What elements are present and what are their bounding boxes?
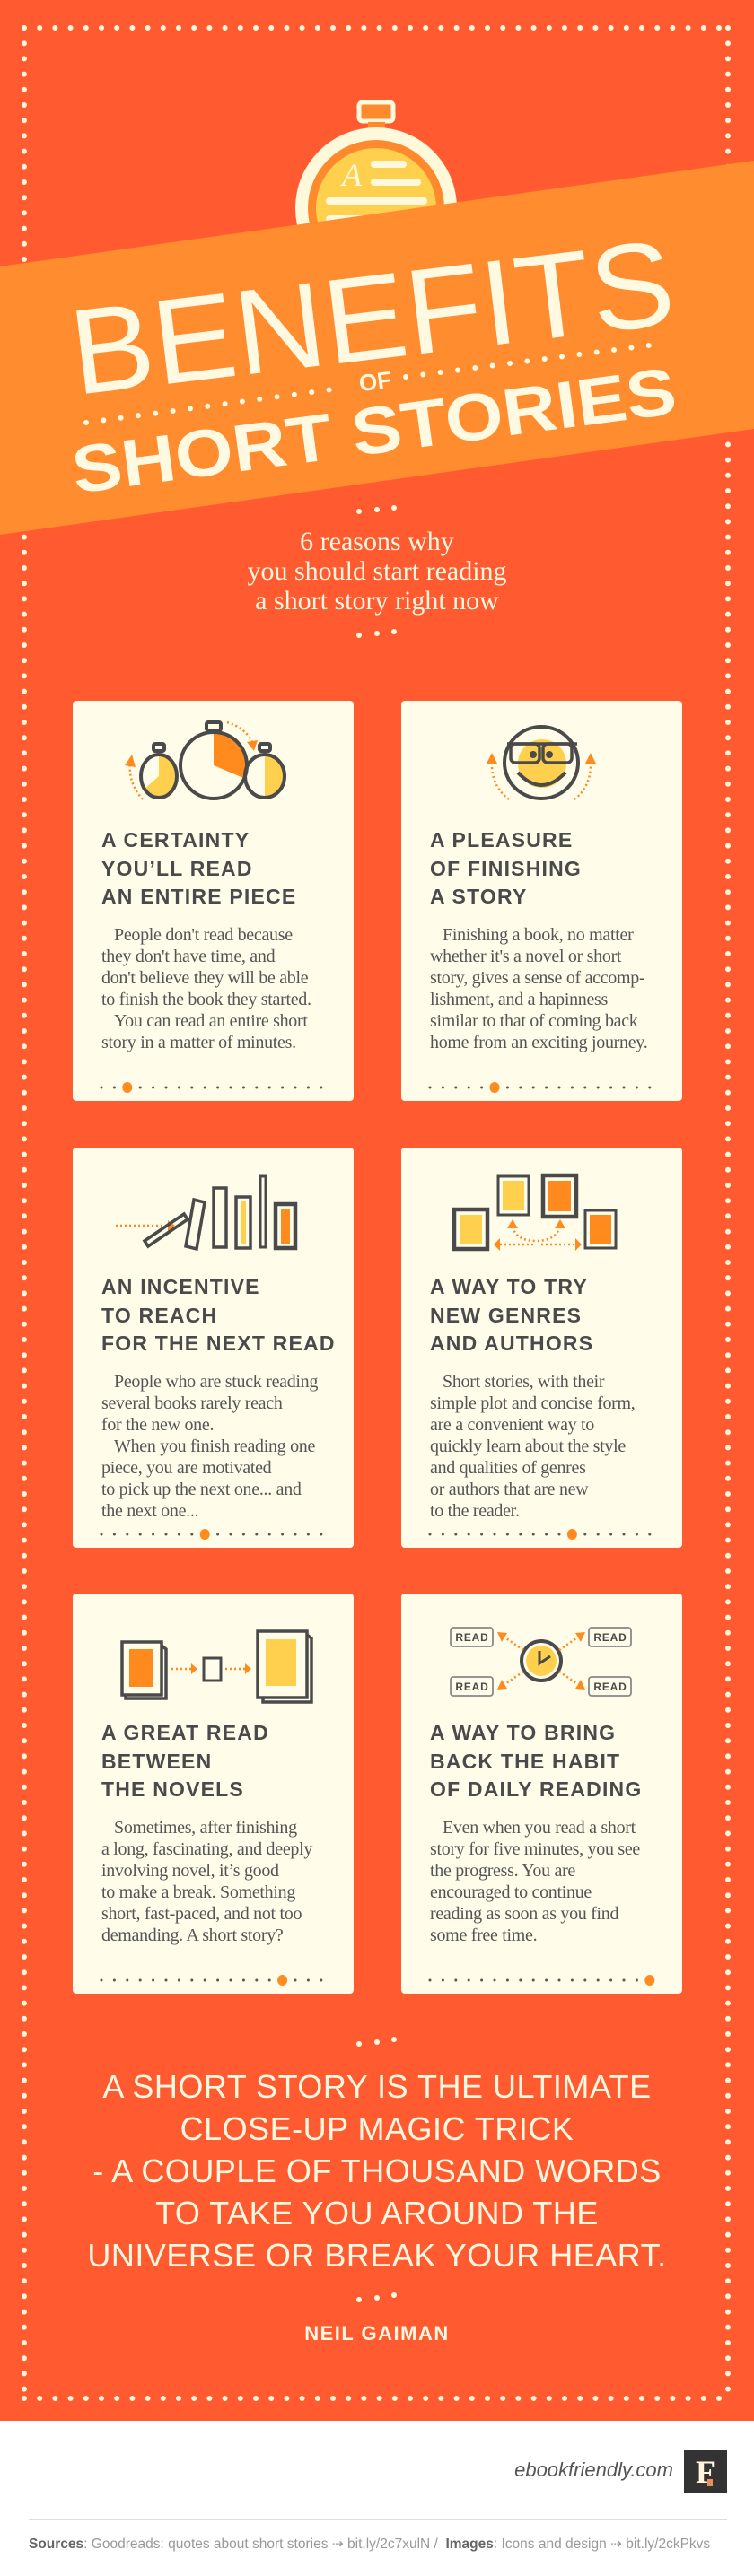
card 4: new genres xyxy=(401,1148,682,1548)
heading: BETWEEN xyxy=(101,1750,212,1773)
card 1: certainty xyxy=(73,701,354,1101)
icon: clock with READ labels: READ xyxy=(593,1681,627,1693)
body text: the next one... xyxy=(101,1501,198,1521)
body text xyxy=(101,925,311,1052)
body text: simple plot and concise form, xyxy=(430,1393,635,1413)
progress dots xyxy=(101,1082,323,1093)
icon: falling books xyxy=(116,1175,298,1251)
icon: smiling face with glasses xyxy=(487,725,596,800)
heading xyxy=(101,828,296,908)
subtitle dots xyxy=(356,505,397,2302)
sources: Sources: Goodreads: quotes about short stories ⇢ bit.ly/2c7xulN / Images: Icons and design ⇢ bit.ly/2ckPkvs xyxy=(29,2537,710,2552)
icon: stopwatch with text: A xyxy=(340,157,363,193)
logo xyxy=(684,2450,727,2493)
heading: OF FINISHING xyxy=(430,856,582,879)
body text: similar to that of coming back xyxy=(430,1011,637,1031)
quote: TO TAKE YOU AROUND THE xyxy=(155,2195,599,2231)
heading: A WAY TO TRY xyxy=(430,1275,588,1298)
progress dots xyxy=(101,1975,323,1986)
body text xyxy=(430,925,647,1052)
quote: - A COUPLE OF THOUSAND WORDS xyxy=(92,2152,662,2189)
body text: reading as soon as you find xyxy=(430,1904,618,1924)
heading: NEW GENRES xyxy=(430,1303,582,1326)
subtitle: 6 reasons why xyxy=(300,527,454,556)
heading: OF DAILY READING xyxy=(430,1777,642,1801)
heading xyxy=(430,828,582,908)
quote author: NEIL GAIMAN xyxy=(304,2322,450,2345)
body text: Short stories, with their xyxy=(443,1372,604,1392)
body text: whether it's a novel or short xyxy=(430,947,621,966)
title: OF with dotted lines: OF xyxy=(357,366,393,397)
body text: and qualities of genres xyxy=(430,1458,586,1478)
body text: encouraged to continue xyxy=(430,1882,592,1902)
quote: CLOSE-UP MAGIC TRICK xyxy=(180,2110,574,2147)
body text: Even when you read a short xyxy=(443,1818,636,1838)
body text: short, fast-paced, and not too xyxy=(101,1904,302,1924)
title: SHORT STORIES: SHORT STORIES xyxy=(67,354,680,508)
title: OF with dotted lines xyxy=(86,344,662,423)
footer brand xyxy=(514,2450,727,2493)
heading: THE NOVELS xyxy=(101,1777,244,1801)
heading: YOU’LL READ xyxy=(101,856,253,879)
heading: A WAY TO BRING xyxy=(430,1721,616,1744)
body text: to the reader. xyxy=(430,1501,520,1521)
heading: BACK THE HABIT xyxy=(430,1750,620,1773)
progress dots xyxy=(429,1529,652,1540)
heading: AN ENTIRE PIECE xyxy=(101,885,296,908)
body text: Finishing a book, no matter xyxy=(443,925,633,945)
body text: When you finish reading one xyxy=(114,1436,315,1456)
body text: quickly learn about the style xyxy=(430,1436,626,1456)
heading xyxy=(101,1275,336,1355)
progress dots xyxy=(429,1975,655,1986)
footer brand: ebookfriendly.com xyxy=(514,2458,673,2481)
body text: to pick up the next one... and xyxy=(101,1480,302,1499)
body text: People don't read because xyxy=(114,925,293,945)
body text xyxy=(430,1372,635,1521)
heading: A PLEASURE xyxy=(430,828,573,851)
body text: several books rarely reach xyxy=(101,1393,283,1413)
body text: People who are stuck reading xyxy=(114,1372,318,1392)
banner band xyxy=(0,161,754,535)
title: BENEFITS: BENEFITS xyxy=(63,214,681,421)
body text: lishment, and a hapinness xyxy=(430,990,608,1009)
body text: Sometimes, after finishing xyxy=(114,1818,297,1838)
card 3: incentive xyxy=(73,1148,354,1548)
heading xyxy=(430,1275,593,1355)
icon: stopwatch with text xyxy=(295,102,457,289)
body text xyxy=(101,1372,318,1521)
body text: demanding. A short story? xyxy=(101,1925,283,1945)
icon: clock with READ labels: READ xyxy=(455,1631,489,1644)
subtitle xyxy=(247,527,507,616)
subtitle: a short story right now xyxy=(255,586,499,616)
card 5: great read between novels xyxy=(73,1594,354,1994)
icon: three stopwatches xyxy=(125,720,286,800)
body text xyxy=(430,1818,640,1945)
body text: for the new one. piece, you are motivated xyxy=(101,1415,271,1478)
icon: clock with READ labels: READ xyxy=(593,1631,627,1644)
body text: they don't have time, and xyxy=(101,947,275,966)
body text: home from an exciting journey. xyxy=(430,1033,647,1052)
body text: story for five minutes, you see xyxy=(430,1839,640,1859)
heading: FOR THE NEXT READ xyxy=(101,1332,336,1355)
icon: big book, small book, big book xyxy=(120,1629,313,1704)
icon: clock with READ labels xyxy=(450,1627,632,1697)
body text: to make a break. Something xyxy=(101,1882,295,1902)
icon: clock with READ labels: READ xyxy=(455,1681,489,1693)
heading: TO REACH xyxy=(101,1303,217,1326)
quote: UNIVERSE OR BREAK YOUR HEART. xyxy=(87,2237,667,2274)
body text: a long, fascinating, and deeply xyxy=(101,1839,312,1859)
body text: are a convenient way to xyxy=(430,1415,594,1435)
subtitle: you should start reading xyxy=(247,556,507,586)
progress dots xyxy=(429,1082,652,1093)
body text: story, gives a sense of accomp- xyxy=(430,968,644,988)
icon: four framed books with arrows xyxy=(452,1174,618,1251)
body text: to finish the book they started. story in a matter of minutes. xyxy=(101,990,311,1052)
body text: involving novel, it’s good xyxy=(101,1861,279,1881)
card 2: pleasure xyxy=(401,701,682,1101)
heading: A GREAT READ xyxy=(101,1721,269,1744)
quote: A SHORT STORY IS THE ULTIMATE xyxy=(102,2068,652,2105)
heading xyxy=(101,1721,269,1801)
heading xyxy=(430,1721,642,1801)
body text: You can read an entire short xyxy=(114,1011,308,1031)
body text: some free time. xyxy=(430,1925,537,1945)
heading: A STORY xyxy=(430,885,528,908)
body text: or authors that are new xyxy=(430,1480,588,1499)
body text: the progress. You are xyxy=(430,1861,575,1881)
logo: F xyxy=(696,2454,715,2490)
heading: A CERTAINTY xyxy=(101,828,250,851)
body text xyxy=(101,1818,312,1945)
heading: AND AUTHORS xyxy=(430,1332,593,1355)
quote xyxy=(87,2068,667,2274)
progress dots xyxy=(101,1529,323,1540)
body text: don't believe they will be able xyxy=(101,968,308,988)
card 6: daily reading habit xyxy=(401,1594,682,1994)
heading: AN INCENTIVE xyxy=(101,1275,260,1298)
